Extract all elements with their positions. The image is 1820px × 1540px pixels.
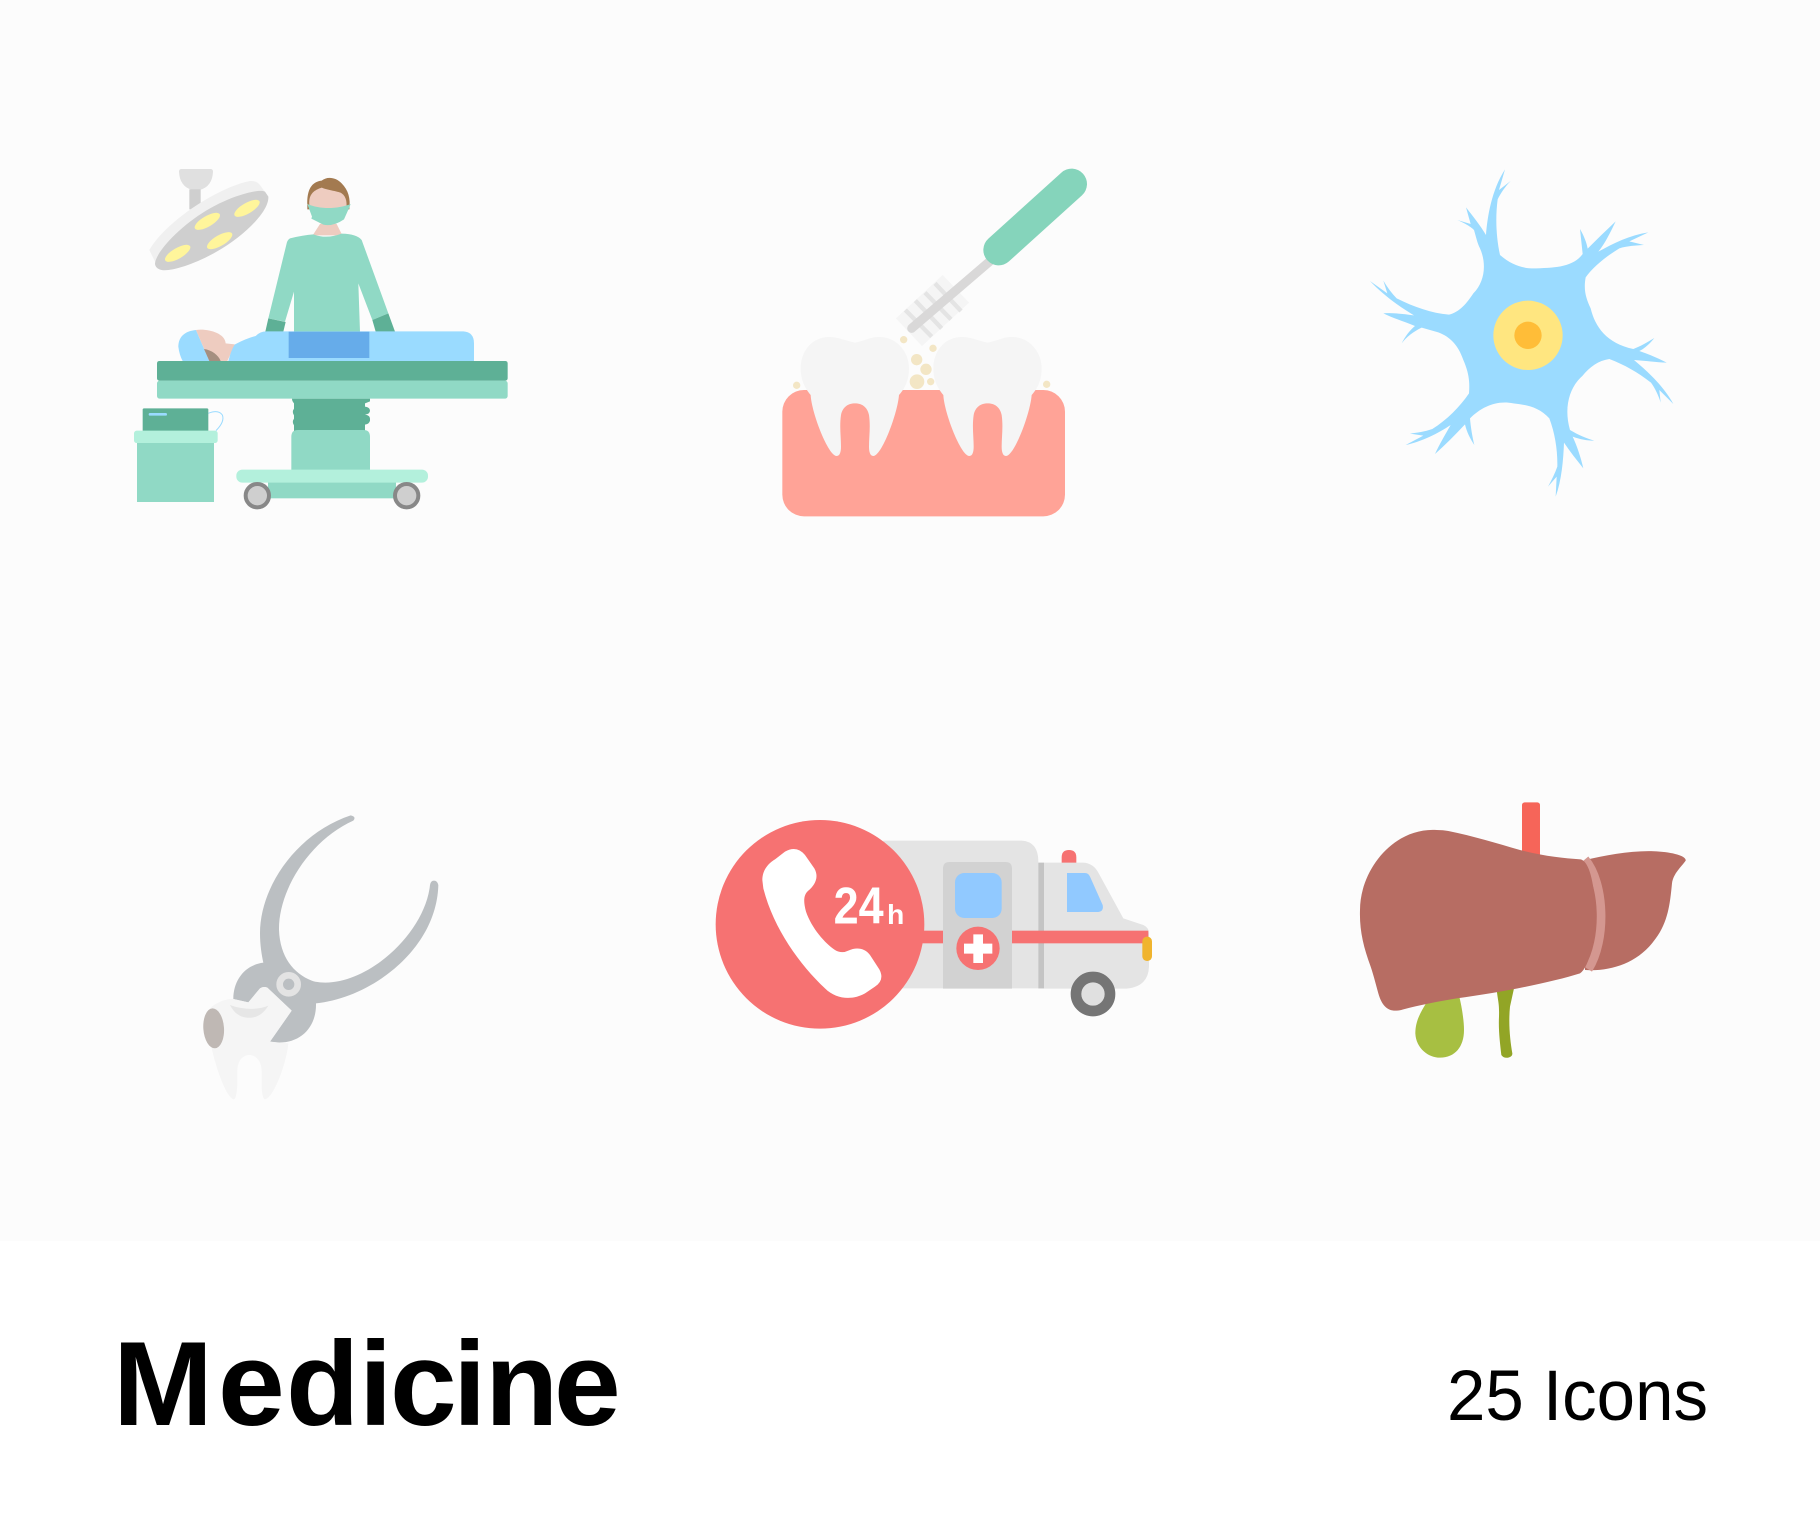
falciform ligament xyxy=(1585,859,1601,969)
nucleus xyxy=(1493,301,1563,370)
equipment cart with monitor xyxy=(134,408,223,502)
ambulance xyxy=(883,841,1152,1011)
forceps pivot xyxy=(280,975,298,993)
operating table xyxy=(157,361,508,507)
icon: neuron xyxy=(1370,169,1673,497)
dental brush xyxy=(896,184,1072,346)
phone badge: h xyxy=(887,899,904,930)
neuron cell body and dendrites xyxy=(1370,169,1673,497)
gallbladder xyxy=(1415,997,1464,1058)
bile duct xyxy=(1497,988,1514,1058)
icon: liver xyxy=(1360,802,1686,1058)
gums xyxy=(782,390,1065,516)
icon: tooth extraction forceps xyxy=(202,815,438,1099)
plaque particles xyxy=(793,336,1050,389)
icon: operating room surgeon and patient xyxy=(134,169,508,507)
surgeon xyxy=(265,178,395,332)
tooth right xyxy=(933,337,1042,456)
liver right lobe xyxy=(1360,830,1595,1011)
title: Medicine xyxy=(113,1317,621,1451)
icon: 24h ambulance xyxy=(716,820,1152,1029)
icon count: 25 Icons xyxy=(1447,1357,1708,1436)
extracted tooth xyxy=(202,987,292,1099)
phone badge xyxy=(716,820,924,1029)
tooth left xyxy=(801,337,909,456)
icon: teeth cleaning brush xyxy=(782,184,1072,516)
nucleolus xyxy=(1514,322,1542,349)
phone badge: 24 xyxy=(834,877,884,935)
liver left lobe xyxy=(1585,851,1686,970)
hepatic artery xyxy=(1522,802,1540,866)
surgical lamp xyxy=(149,169,268,270)
forceps xyxy=(233,815,438,1043)
patient xyxy=(178,330,474,361)
